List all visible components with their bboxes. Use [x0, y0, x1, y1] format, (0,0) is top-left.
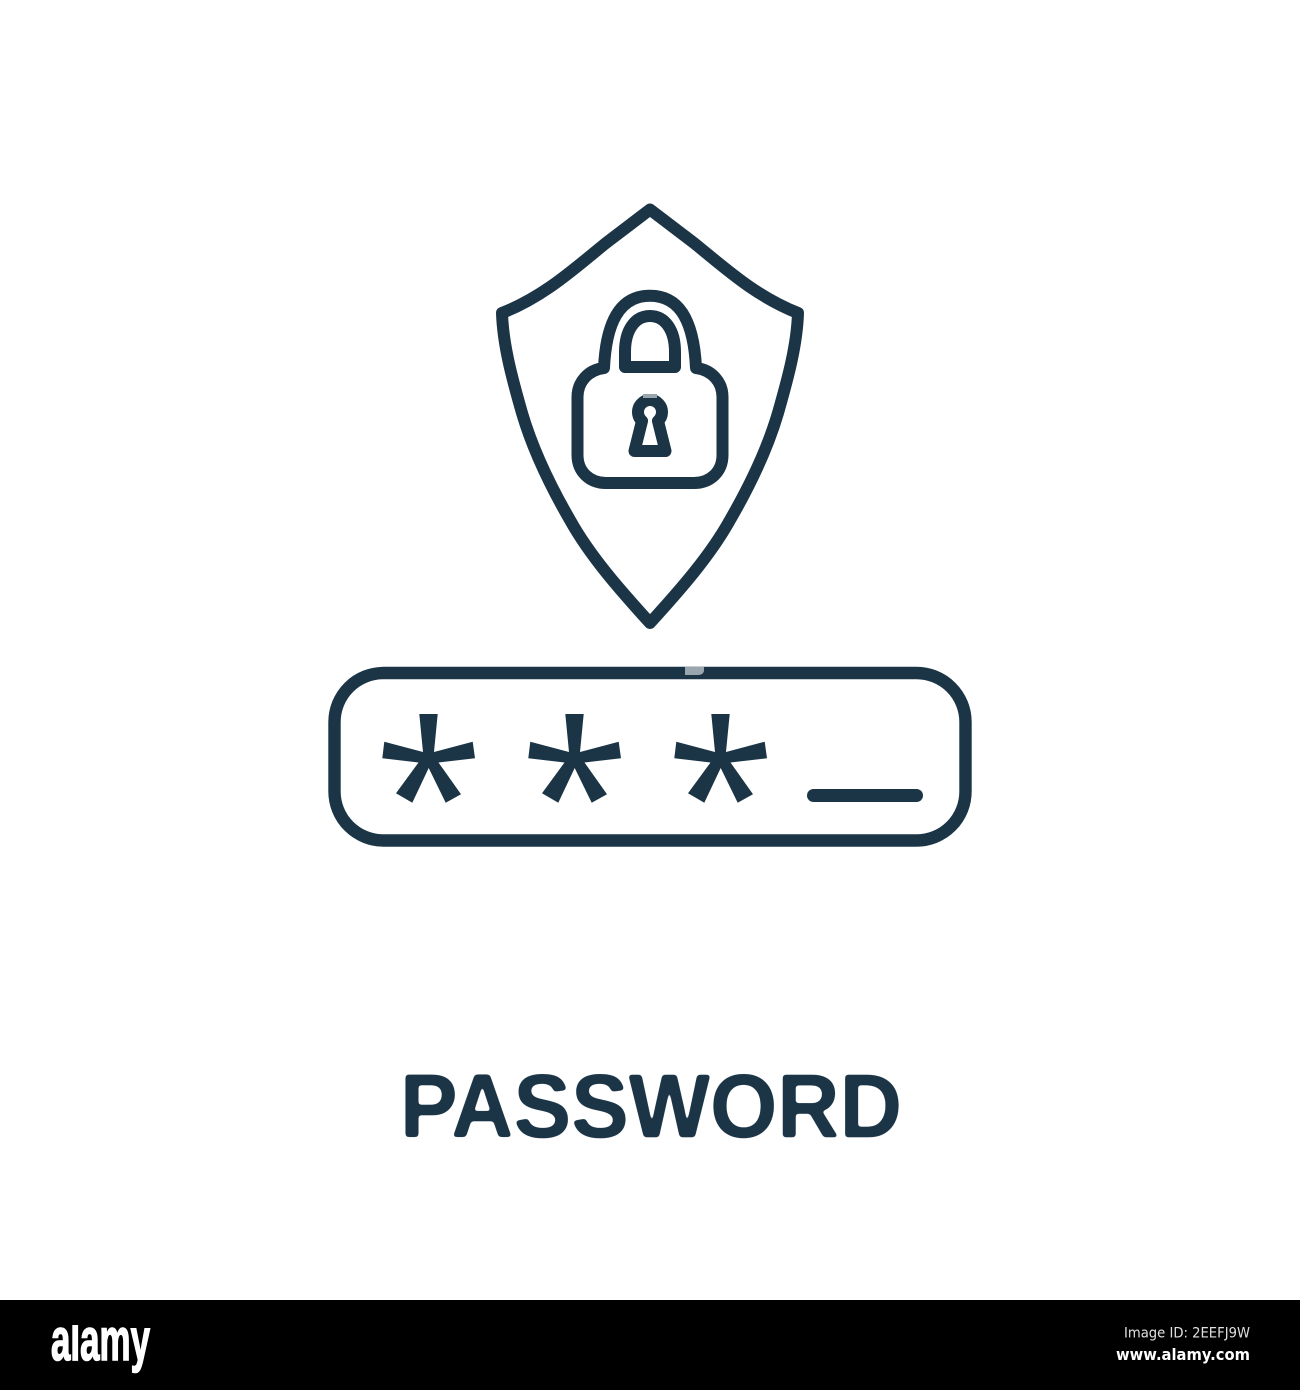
shield outline: [502, 210, 798, 623]
input field outline: [334, 673, 966, 840]
footer band: [0, 1300, 1300, 1390]
footer logo: alamy: [51, 1307, 150, 1373]
asterisk 1: [382, 714, 475, 803]
cursor dash: [807, 789, 923, 802]
keyhole watermark speck: [643, 394, 657, 398]
padlock body and outer shackle: [578, 296, 722, 483]
field watermark speck: [685, 667, 704, 675]
keyhole: [634, 400, 666, 451]
asterisk 2: [528, 714, 621, 803]
website: www.alamy.com: [1116, 1345, 1250, 1364]
title: PASSWORD: [400, 1057, 902, 1157]
image id: Image ID: 2EEFJ9W: [1124, 1326, 1250, 1342]
asterisk 3: [674, 714, 767, 803]
padlock inner shackle: [625, 316, 675, 367]
icon: password input field: [334, 667, 966, 840]
icon: shield with padlock: [502, 210, 798, 623]
